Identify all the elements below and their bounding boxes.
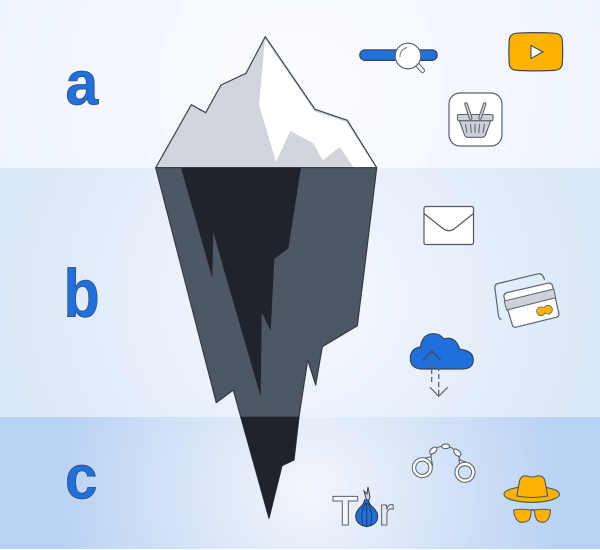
letter a: a bbox=[66, 48, 99, 118]
icon: envelope bbox=[424, 206, 474, 244]
icon: Tor logo: T bbox=[332, 487, 358, 534]
icon: cloud transfer bbox=[410, 334, 473, 396]
letter b: b bbox=[64, 255, 100, 331]
icon: incognito hat and glasses bbox=[504, 476, 559, 522]
letter c: c bbox=[65, 443, 97, 512]
icon: handcuffs bbox=[414, 444, 473, 481]
dark core bbox=[181, 168, 301, 397]
iceberg tip bbox=[156, 37, 377, 168]
band: middle layer bbox=[0, 168, 600, 417]
icon: video play bbox=[509, 33, 563, 71]
icon: credit cards bbox=[495, 274, 559, 327]
band: deep layer bbox=[0, 417, 600, 549]
submerged body bbox=[156, 168, 377, 518]
iceberg bbox=[156, 37, 377, 518]
band: surface layer bbox=[0, 0, 600, 168]
icon: Tor logo bbox=[332, 487, 394, 534]
icon: shopping basket bbox=[449, 93, 502, 146]
deep tip bbox=[241, 417, 299, 518]
snow highlight bbox=[259, 39, 376, 167]
icon: Tor logo: r bbox=[379, 492, 394, 534]
icon: search slider bbox=[360, 43, 437, 70]
